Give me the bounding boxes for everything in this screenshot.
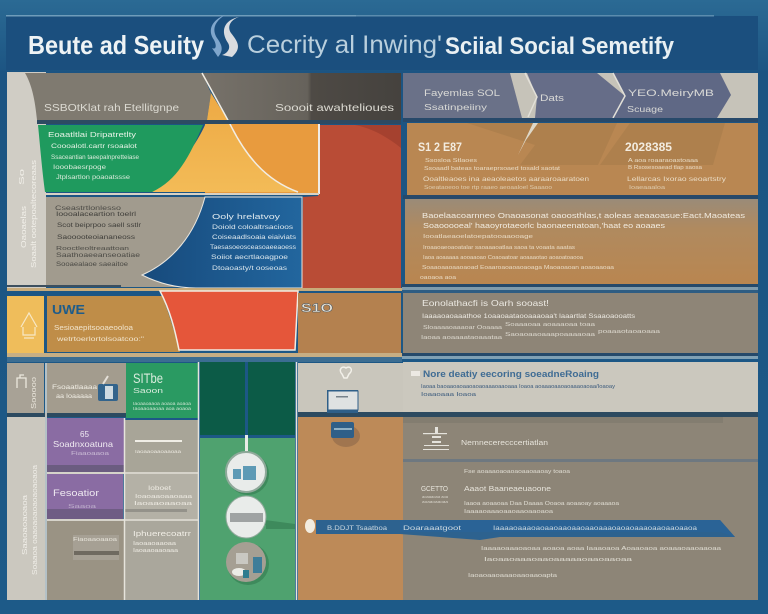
panel: brown text block	[405, 199, 758, 284]
icon: circle devices	[226, 542, 269, 585]
header band	[6, 15, 758, 70]
icon: logo swirl	[211, 15, 239, 57]
panel: right chevrons	[403, 73, 758, 118]
panel: grey text block: Ioooalaceartion toelrl	[56, 211, 137, 218]
panel: lower left grey tile: Sooooo	[31, 377, 38, 409]
heading: centre: Soooit awahtelioues	[275, 102, 394, 114]
panel: grey text block right: poaaaotaoaoaaa	[598, 329, 661, 335]
panel: brown stats row: A aoa roaaraoastoaaa	[628, 158, 699, 164]
panel: brown stats row	[407, 123, 758, 195]
panel: lower grey block: Iaaaaoaaaoaaoaaoaaoaoa	[464, 509, 554, 515]
panel: green text block: Ssaceantian taeepalnpretteiase	[51, 155, 140, 161]
panel: left light strip lower	[7, 417, 45, 600]
panel: blue text block	[142, 197, 302, 288]
icon: card	[331, 422, 360, 447]
panel: grey note four: Iphuerecoatrr	[133, 531, 192, 538]
panel: grey card with icon: aa Ioaaaaa	[56, 394, 93, 400]
ribbon banner: Iaaaaoaaaoaoaaoaaoaaoaaoaaaoaoaoaaaoaaoaaoaaoa	[493, 526, 698, 532]
panel: green column with circular icons	[200, 435, 295, 600]
panel: light callout: Ioaaoaaa Ioaoa	[421, 392, 477, 398]
panel: grey note three	[47, 521, 124, 600]
panel: brown stats row: Ooaltleaoes ina aeaoleaetos aaraaroaaratoen	[423, 177, 589, 183]
panel: green text block: Jtplsartlon poaoatssse	[56, 175, 131, 181]
panel: grey text block right: Iaoaa aoaaaataoaaataa	[421, 335, 503, 341]
white outline of top blocks	[318, 124, 320, 194]
panel: right chevrons: Scuage	[627, 105, 664, 114]
panel: lower grey block: GCETTO	[421, 486, 449, 493]
panel: grey note three: Fiaoaaoaaoa	[73, 537, 118, 543]
panel: brown stat block right: S1O	[301, 301, 333, 315]
panel: brown stats row: Lellarcas Ixorao seoartstry	[627, 176, 727, 183]
panel: grey text block: Sooaealaoe saeaitoe	[56, 262, 129, 268]
panel: blue text block: Soiiot aecrtlaoagpoe	[211, 254, 288, 261]
panel: purple card two	[47, 474, 123, 519]
icon: bag	[98, 376, 118, 401]
panel: grey text block: Scot beiprpoo saell sstlr	[57, 222, 142, 229]
panel: right chevrons: Dats	[540, 93, 565, 103]
line: white curve along peak	[202, 73, 298, 192]
panel: right chevrons: YEO.MeiryMB	[628, 88, 714, 98]
panel: blue text block: Doiold coloaltrsacioos	[212, 224, 294, 231]
panel: grey note four: Iaoaaoaaoaa	[133, 541, 176, 547]
title	[28, 30, 675, 60]
panel: brown text block: Soaaoaaoaaoaoad Eoaaroaoaoaoaoaga Maoaoaoan aoaoaaoaa	[422, 265, 615, 271]
panel: grey text block	[46, 197, 206, 287]
ribbon banner: Doaraaatgoot	[403, 525, 461, 532]
panel: green stat card: Saoon	[133, 386, 163, 395]
panel: purple card two: Fesoatior	[53, 488, 99, 499]
panel: blue text block: Dtoaoasty/t ooseoas	[212, 265, 288, 272]
panel: left light strip lower: Soaaoa oaaoaoaoaoaoaoaoa	[30, 464, 39, 575]
left strip vertical labels: Soaalt ootepoaltecoreaas	[31, 159, 38, 268]
left strip vertical labels: So	[19, 169, 26, 185]
left strip vertical labels: Oaoaelas	[21, 205, 28, 248]
panel: right chevrons: Fayemlas SOL	[424, 88, 500, 98]
panel: grey card with icon: Fsoaatlaaaa	[52, 384, 97, 391]
panel: green stat card: Iaoaaoaaoaa aoa aoaoa	[133, 406, 192, 411]
panel: green stat card: SITbe	[133, 370, 163, 386]
panel: light callout: Iaoaa baoaaoaoaaoaoaoaaaoaaoaaa Ioaoa aoaaaoaaoaoaaaoaoaa/Ioaoay	[421, 384, 615, 390]
panel: grey note two: Iaoaaoaaoaa	[134, 501, 192, 507]
panel: green text block: Iooobaesrpoge	[53, 165, 107, 171]
panel: brown stats row: B Rsosesoaead tlap saosa	[628, 165, 703, 171]
panel: purple card one: Soadnxoatuna	[53, 439, 113, 449]
panel: green text block: Eoaatltlai Dripatretlty	[48, 130, 136, 139]
panel: grey note four	[124, 521, 198, 600]
panel: purple card two: Saaoa	[68, 504, 98, 510]
panel: grey text block right: Saoaoaaoaaapoaaaaoaa	[505, 332, 596, 338]
panel: brown stat block: wetrtoerlortolsoatcoo:"	[56, 336, 145, 343]
panel: brown stats row: S1 2 E87	[418, 140, 462, 154]
panel: brown text block: Iooatlaeaoelatoepatooaaooage	[423, 234, 533, 240]
panel: grey note one	[124, 420, 198, 472]
panel: orange block	[205, 120, 318, 193]
panel: top grey heading	[25, 73, 211, 120]
divider bar	[403, 118, 758, 122]
panel: brown text block: Baoelaacoarnneo Onaoasonat oaoosthlas,t aoleas aeaaoasue:Eact.Maoateas	[422, 211, 745, 220]
panel: blue text block: Ooly hrelatvoy	[212, 212, 280, 221]
panel: top dark heading	[202, 73, 401, 120]
panel: lower grey block: Iaoaoaaoaaaoaaoaaoapta	[468, 573, 558, 579]
panel: grey text block: Saooooteoiananeoss	[57, 234, 136, 241]
panel: blue text block: Coiseaadlsoaia eiaiviats	[212, 234, 297, 241]
panel: grey text block right	[403, 293, 758, 353]
panel: red block lower	[160, 291, 298, 350]
panel: brown stats row: Ssosloa Stlaoes	[425, 158, 477, 164]
panel: brown text block: Iroaaoaeoaoatalar saoaaaoatlaa saoa ta voaata aaatas	[423, 245, 575, 251]
panel: green stat card: Iaoaaoaaoa aoaoa aoaoa	[133, 401, 192, 406]
panel: right chevrons: Ssatinpeiiny	[424, 102, 488, 112]
divider bar	[37, 120, 401, 124]
panel: brown stats row: Ssoaadl bateas toaraeprsoaed tosald saotat	[424, 166, 561, 172]
panel: grey note one: Iaoaaoaaoaaoaa	[135, 449, 182, 454]
left strip vertical labels	[19, 159, 38, 268]
panel: lower grey block: Iaaaaoaaaoaoaa aoaoa aoaa Iaaaoaoa Aoaaoaoa aoaaaoaaoaaoaa	[481, 546, 722, 552]
panel: grey text block: Rooctleoltreaattoan	[56, 246, 129, 252]
title: Cecrity al Inwing'	[247, 31, 442, 59]
ribbon banner: B.DDJT Tsaatboa	[327, 525, 387, 532]
panel: purple card one: 65	[80, 430, 90, 439]
panel: brown stat block	[47, 296, 180, 352]
panel: grey note two	[124, 474, 198, 519]
panel: tan column	[298, 417, 403, 600]
panel: brown stat block: Sesioaepitsooaeooloa	[54, 325, 133, 332]
panel: lower grey block: Iaaoa aoaaoaa Daa Daaaa Ooaoa aoaaoay aoaaaoa	[464, 501, 620, 507]
panel: grey note four: Iaoaaoaaoaaa	[133, 548, 178, 554]
panel: grey text block right: Iaaaaoaoaaathoe 1oaaoaataooaaaoaa't laaartlat Ssaaoaooatts	[422, 313, 636, 320]
panel: blue text block: Taesasoeosceasoaeeaoess	[210, 245, 296, 251]
panel: grey card with icon	[47, 363, 126, 413]
bar under grey card	[7, 413, 126, 417]
panel: brown stats row: Soeataoeoo toe rtp raaeo aeoaaloel Saaaoo	[424, 185, 552, 191]
panel: brown stat block: UWE	[52, 302, 85, 317]
panel: lower grey block: Nemnecerecccertiatlan	[461, 440, 548, 447]
title: Beute ad Seuity	[28, 30, 204, 60]
panel: grey text block: Saathoaeeanseoatiae	[56, 253, 141, 259]
icon: building	[423, 427, 449, 450]
panel: left light strip lower: Saaoaoaoaoa	[20, 494, 29, 555]
panel: brown text block: Iaoa aoaaaaa aooaaoao Coaoaatoar aoaaaotao aoaoatoaooa	[423, 255, 584, 261]
heading: left: SSBOtKlat rah Etellitgnpe	[44, 102, 179, 114]
panel: green text block	[38, 125, 203, 192]
ribbon banner	[305, 519, 735, 540]
panel: purple card one: Fiaaoaaoa	[71, 451, 110, 457]
panel: brown stats row: 2028385	[625, 140, 672, 154]
icon: small clipboard	[17, 375, 26, 388]
panel: green stat card	[126, 363, 198, 418]
panel: lower grey block: Fse aoaaaoaoaoaoaaoaaoay toaoa	[464, 469, 571, 475]
panel: lower grey block	[403, 417, 758, 600]
panel: purple card one	[47, 418, 124, 472]
panel: brown text block: Soaooooeal' haaoyrotaeorlc baonaeenatoan,'haat eo aoaaes	[423, 223, 666, 230]
panel: green text block: Coooalotl.cartr rsoaalot	[51, 143, 137, 150]
icon: circle documents	[226, 452, 269, 495]
panel: lower grey block: aoaaaoaa aoa	[422, 494, 449, 499]
icon: house	[21, 313, 37, 338]
panel: grey text block: Cseastrtlonlesso	[55, 206, 122, 212]
icon: circle envelope	[226, 496, 295, 538]
panel: lower grey block: Aaaot Baaneaeuaoone	[464, 486, 551, 493]
panel: grey text block right: Soaaaoaa aoaaaoaa toaa	[505, 322, 596, 328]
panel: lower left grey tile	[7, 363, 44, 413]
panel: lower grey block: aoaaoaaoaa	[422, 499, 449, 504]
panel: brown stats row: Ioaeaaaloa	[629, 185, 665, 191]
panel: light callout: Nore deatiy eecoring soeadneRoaing	[423, 369, 599, 379]
panel: grey note two: Ioaoaaoaaoaaa	[135, 494, 193, 500]
panel: dark green tiles	[200, 362, 295, 435]
white grid lines	[46, 362, 296, 600]
panel: left light strip	[7, 72, 46, 288]
panel: lower grey block: Iaoaaoaaaoaaoaaaaaoaaoaaoaa	[484, 557, 634, 563]
panel: light callout	[403, 362, 758, 412]
panel: red block	[302, 125, 401, 288]
title: Sciial Social Semetify	[445, 33, 675, 60]
panel: brown stat block right	[298, 293, 401, 353]
panel: yellow peak	[152, 93, 298, 192]
panel: brown text block: oaoaoa aoa	[420, 275, 457, 281]
panel: light tile	[298, 363, 403, 412]
panel: grey note two: Ioboet	[148, 485, 171, 492]
panel: grey text block right: Eonolathacfi is Oarh sooast!	[422, 298, 549, 308]
icon: certificate document	[327, 367, 358, 413]
panel: grey text block right: Sloaaaaoaaaoar Ooaaaa	[423, 325, 503, 331]
panel: yellow icon tile	[7, 296, 44, 354]
